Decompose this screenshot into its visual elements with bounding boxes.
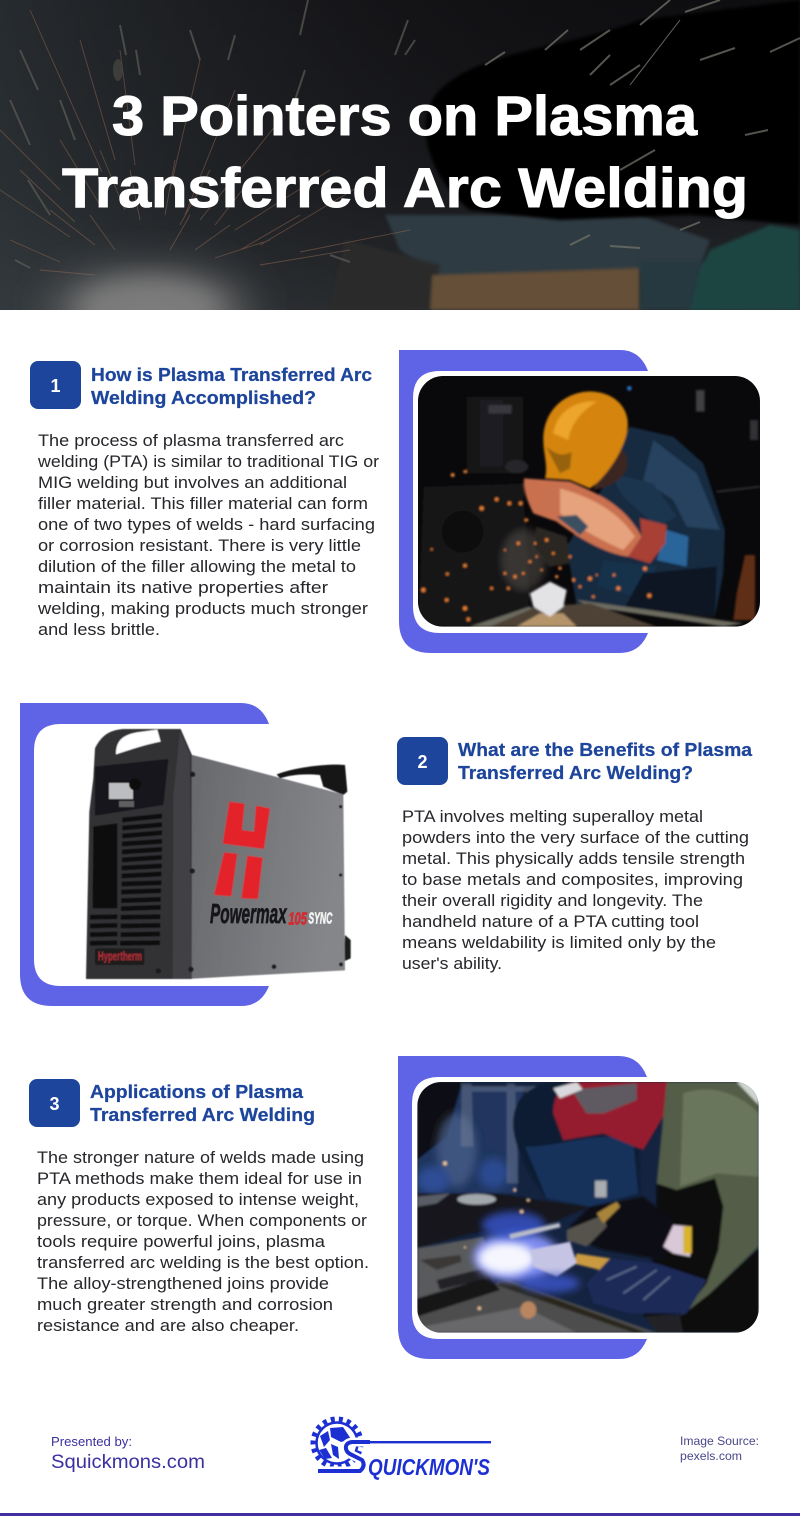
photo: Powermax plasma cutter: Hypertherm xyxy=(98,949,142,963)
section 1 body text: filler material. This filler material can form xyxy=(38,494,368,513)
header background photo: welding sparks xyxy=(0,0,800,310)
section 3 body text: transferred arc welding is the best option. xyxy=(37,1253,369,1272)
Powermax model name: 105 xyxy=(288,908,307,928)
section 2 body text: user's ability. xyxy=(402,954,502,973)
section 1 heading: Welding Accomplished? xyxy=(91,387,316,408)
section 1 body text: The process of plasma transferred arc xyxy=(38,431,344,450)
footer: image source xyxy=(680,1434,759,1463)
title: 3 Pointers on Plasma xyxy=(112,84,698,147)
section 3 body text: any products exposed to intense weight, xyxy=(37,1190,359,1209)
section 2 heading: What are the Benefits of Plasma xyxy=(458,739,753,760)
section 3 badge: 3 xyxy=(49,1094,60,1114)
photo: welder in orange hard hat xyxy=(418,376,760,627)
logo: Squickmon's gear: QUICKMON'S xyxy=(368,1454,491,1480)
section 3 heading: Transferred Arc Welding xyxy=(90,1104,315,1125)
Powermax model name: SYNC xyxy=(308,911,333,928)
footer: presented by xyxy=(51,1435,205,1473)
section 2 body text: powders into the very surface of the cutting xyxy=(402,828,749,847)
section 3 body text xyxy=(37,1148,369,1335)
photo: welder in dark helmet xyxy=(417,1082,759,1333)
section 3 body text: pressure, or torque. When components or xyxy=(37,1211,367,1230)
section 1 body text: welding (PTA) is similar to traditional TIG or xyxy=(37,452,379,471)
footer: presented by: Presented by: xyxy=(51,1435,132,1449)
section 1 body text: or corrosion resistant. There is very little xyxy=(38,536,361,555)
section 2 badge xyxy=(397,737,448,785)
panel: photo frame 1 xyxy=(399,350,760,653)
title: Transferred Arc Welding xyxy=(62,156,748,219)
footer: image source: Image Source: xyxy=(680,1434,759,1448)
section 1 body text: and less brittle. xyxy=(38,620,160,639)
section 2 body text: their overall rigidity and longevity. The xyxy=(402,891,703,910)
title xyxy=(62,84,748,219)
section 2 body text: metal. This physically adds tensile strength xyxy=(402,849,745,868)
header banner xyxy=(0,0,800,310)
section 1 badge: 1 xyxy=(50,376,61,396)
section 3 body text: resistance and are also cheaper. xyxy=(37,1316,299,1335)
section 3 body text: much greater strength and corrosion xyxy=(37,1295,333,1314)
footer: image source: pexels.com xyxy=(680,1449,742,1463)
section 3 heading xyxy=(90,1081,315,1125)
section 2 heading: Transferred Arc Welding? xyxy=(458,762,693,783)
photo: Powermax plasma cutter xyxy=(86,729,351,979)
section 2 body text xyxy=(402,807,749,973)
section 2 body text: to base metals and composites, improving xyxy=(402,870,743,889)
section 3 body text: PTA methods make them ideal for use in xyxy=(37,1169,362,1188)
section 2 heading xyxy=(458,739,753,783)
section 1 body text xyxy=(37,431,379,639)
section 1 badge xyxy=(30,361,81,409)
footer: presented by: Squickmons.com xyxy=(51,1451,205,1473)
section 3 body text: The stronger nature of welds made using xyxy=(37,1148,364,1167)
section 1 body text: one of two types of welds - hard surfacing xyxy=(38,515,375,534)
section 1 body text: welding, making products much stronger xyxy=(37,599,368,618)
section 2 body text: means weldability is limited only by the xyxy=(402,933,716,952)
section 1 heading xyxy=(91,364,372,408)
section 2 body text: PTA involves melting superalloy metal xyxy=(402,807,703,826)
Powermax model name: Powermax xyxy=(210,898,287,929)
panel: photo frame 3 xyxy=(398,1056,759,1359)
logo: Squickmon's gear xyxy=(313,1419,491,1480)
section 3 body text: tools require powerful joins, plasma xyxy=(37,1232,326,1251)
section 1 body text: maintain its native properties after xyxy=(38,578,328,597)
section 1 heading: How is Plasma Transferred Arc xyxy=(91,364,372,385)
section 3 badge xyxy=(29,1079,80,1127)
panel: photo frame 2 xyxy=(20,703,351,1006)
section 3 body text: The alloy-strengthened joins provide xyxy=(37,1274,329,1293)
section 1 body text: dilution of the filler allowing the metal to xyxy=(38,557,356,576)
section 1 body text: MIG welding but involves an additional xyxy=(38,473,347,492)
section 2 body text: handheld nature of a PTA cutting tool xyxy=(402,912,699,931)
section 3 heading: Applications of Plasma xyxy=(90,1081,304,1102)
section 2 badge: 2 xyxy=(417,752,428,772)
